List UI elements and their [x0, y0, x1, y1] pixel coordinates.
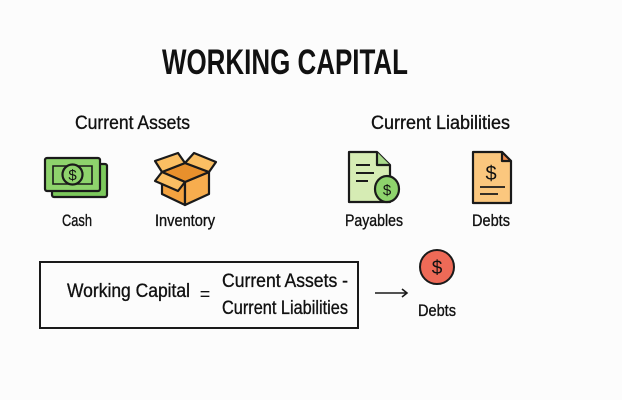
label: payables: Payables — [345, 211, 403, 230]
heading: current liabilities: Current Liabilities — [371, 113, 510, 134]
label: debts outcome: Debts — [418, 301, 456, 320]
heading: current assets: Current Assets — [75, 113, 190, 134]
formula box: Working Capital — [67, 281, 190, 302]
arrow — [375, 289, 407, 297]
icon: payables — [349, 152, 399, 202]
icon: debts coin: $ — [432, 258, 443, 279]
icon: payables: $ — [383, 182, 392, 199]
icon: debts document: $ — [485, 163, 497, 185]
icon: debts coin — [420, 250, 454, 284]
label: debts: Debts — [472, 211, 510, 230]
icon: inventory box — [155, 153, 216, 205]
icon: debts document — [473, 152, 511, 203]
formula box — [40, 262, 358, 328]
icon: cash: $ — [68, 167, 77, 184]
label: cash: Cash — [62, 211, 92, 230]
formula box: = — [200, 284, 210, 304]
label: inventory: Inventory — [155, 211, 215, 230]
formula box: Current Liabilities — [222, 298, 348, 319]
formula box: Current Assets - — [222, 271, 348, 292]
title: WORKING CAPITAL — [162, 43, 408, 82]
icon: cash — [45, 158, 107, 197]
